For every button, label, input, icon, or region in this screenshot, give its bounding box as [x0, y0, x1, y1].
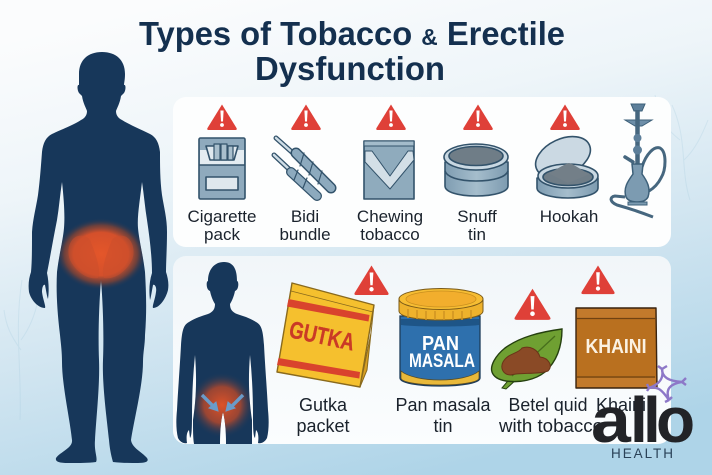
- label: khaini: Khaini: [596, 395, 646, 415]
- label: chewing tobacco: Chewing: [357, 207, 423, 226]
- label: chewing tobacco: tobacco: [360, 225, 420, 244]
- panel: bottom tobacco types: [173, 256, 671, 444]
- warning icon: snuff: [463, 104, 493, 130]
- warning icon: cigarette: [207, 104, 237, 130]
- label: cigarette pack: Cigarette: [188, 207, 256, 226]
- icon: khaini packet: KHAINI: [586, 336, 646, 358]
- logo wordmark: [591, 384, 695, 456]
- label: snuff tin: Snuff: [457, 207, 497, 226]
- label: gutka packet: packet: [296, 416, 350, 436]
- warning icon: gutka: [354, 266, 389, 295]
- label: snuff tin: tin: [468, 225, 486, 244]
- logo wordmark: l: [643, 384, 661, 456]
- logo: allo health: [591, 366, 695, 461]
- label: cigarette pack: pack: [204, 225, 240, 244]
- icon: chewing tobacco pouch: [364, 141, 414, 199]
- icon: pan masala tin: MASALA: [409, 351, 475, 372]
- label: pan masala tin: tin: [433, 416, 453, 436]
- label: gutka packet: Gutka: [299, 395, 347, 415]
- small body silhouette: [176, 262, 269, 444]
- logo subtitle: HEALTH: [611, 446, 673, 461]
- logo wordmark: l: [630, 384, 648, 456]
- icon: gutka packet: [277, 283, 374, 387]
- title: Dysfunction: [255, 50, 445, 87]
- title: [139, 15, 565, 87]
- label: bidi bundle: Bidi: [291, 207, 319, 226]
- icon: bidi bundle: [274, 138, 331, 196]
- label: pan masala tin: Pan masala: [395, 395, 491, 415]
- warning icon: bidi: [291, 104, 321, 130]
- title: Types of Tobacco & Erectile: [139, 15, 565, 52]
- label: bidi bundle: bundle: [279, 225, 331, 244]
- logo sparkle: [647, 366, 686, 402]
- pelvis glow: [58, 220, 144, 288]
- icon: cigarette pack: [199, 138, 245, 199]
- large body silhouette: [29, 52, 168, 463]
- groin glow: [194, 376, 251, 434]
- icon: khaini packet: [576, 308, 657, 388]
- icon: gutka packet: GUTKA: [287, 316, 357, 357]
- warning icon: khaini: [581, 265, 615, 294]
- logo wordmark: o: [656, 384, 695, 456]
- warning icon: hookah label: [550, 104, 580, 130]
- icon: betel leaf: [492, 329, 562, 389]
- icon: hookah: [611, 104, 665, 217]
- icon: snuff tin: [444, 144, 508, 196]
- label: betel quid with tobacco: Betel quid: [508, 395, 588, 415]
- warning icon: chewing tobacco: [376, 104, 406, 130]
- label: with tobacco: with tobacco: [498, 416, 603, 436]
- warning icon: betel: [514, 289, 551, 320]
- label: hookah: Hookah: [540, 207, 598, 226]
- icon: open tin: [529, 128, 598, 198]
- icon: pan masala tin: PAN: [422, 333, 459, 355]
- panel: top tobacco types: [173, 97, 671, 247]
- icon: pan masala tin: [399, 288, 483, 386]
- logo wordmark: a: [591, 385, 632, 456]
- arrows: [202, 395, 243, 411]
